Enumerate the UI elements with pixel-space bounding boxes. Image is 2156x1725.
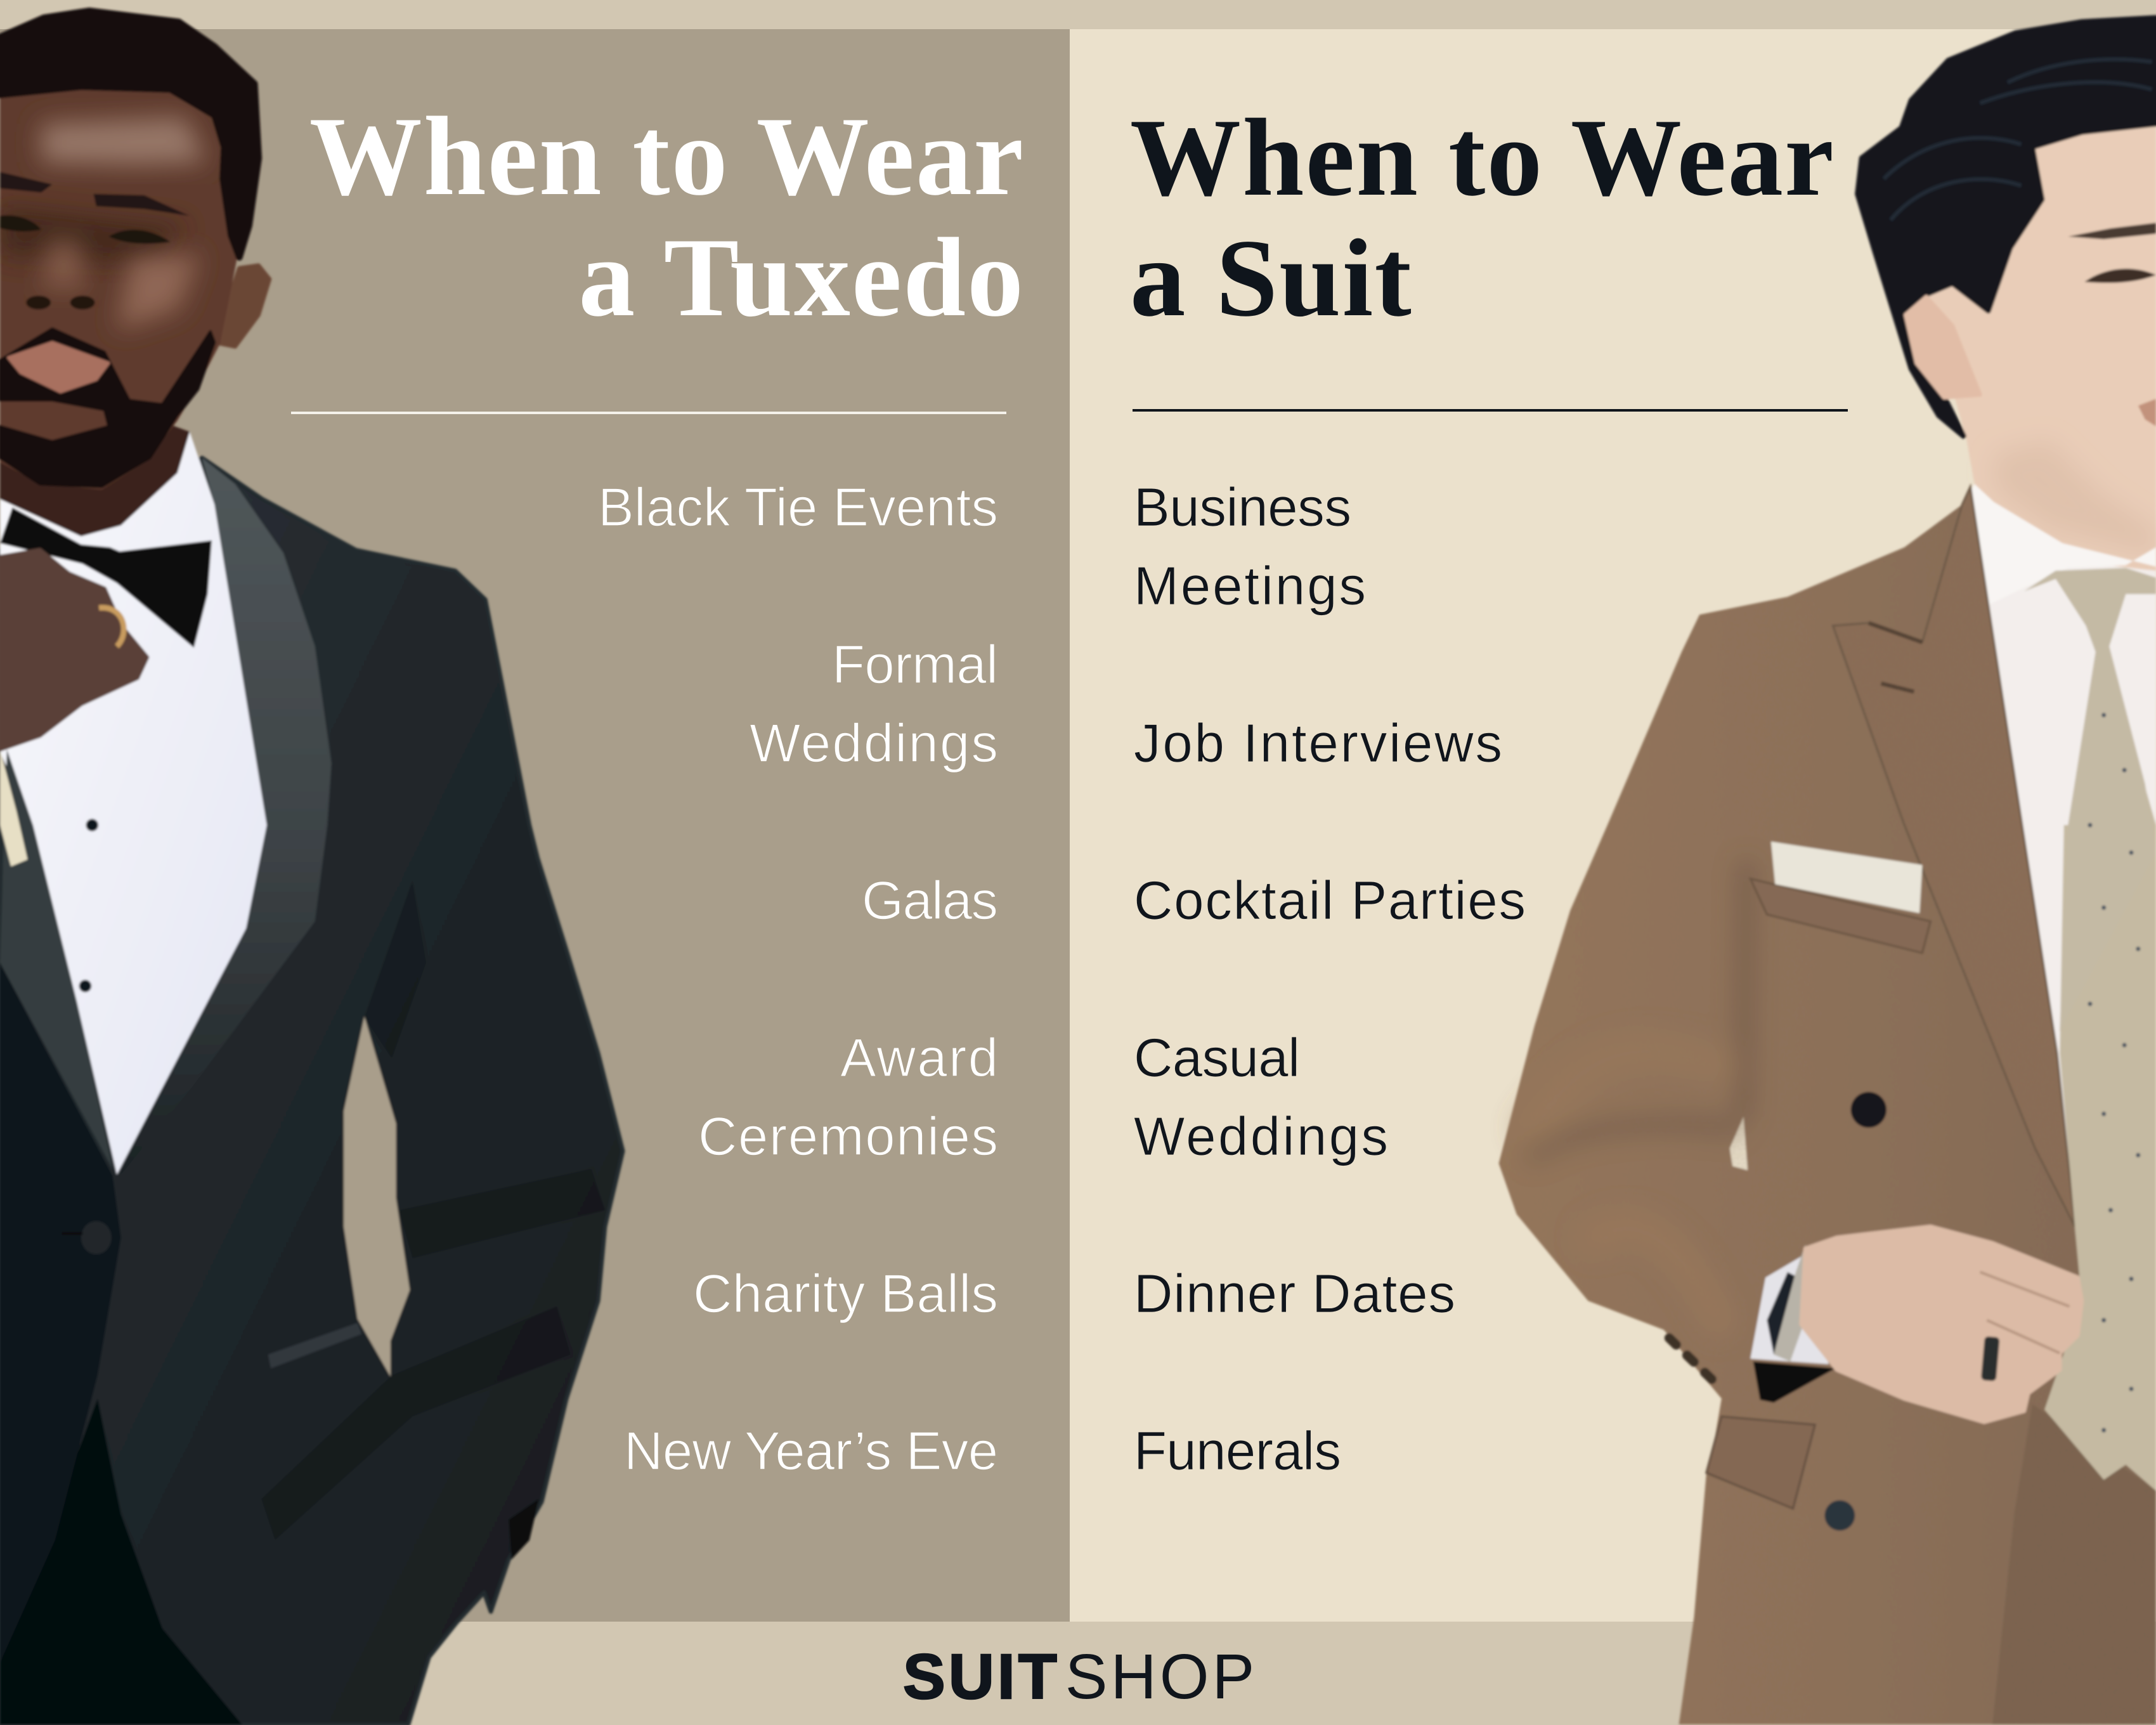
collar [1963, 484, 2156, 605]
buttons [1824, 1092, 1886, 1530]
breast pocket [1750, 879, 1930, 953]
waistcoat and tie [2044, 715, 2156, 1491]
list: suit occasions [1134, 478, 1526, 1481]
cheek highlight [117, 254, 199, 330]
list: suit occasions: Weddings [1134, 1107, 1388, 1167]
boutonniere and studs [0, 750, 98, 993]
cuff and watch [1750, 1240, 1836, 1403]
nose highlight [41, 240, 85, 289]
forehead highlight [41, 117, 206, 165]
title: tuxedo second line: a Tuxedo [578, 214, 1025, 340]
list: suit occasions: Dinner Dates [1134, 1264, 1455, 1324]
ear [1906, 297, 1980, 398]
sleeve buttons [509, 1499, 539, 1559]
tweed noise [1730, 1121, 1814, 1400]
list: tuxedo occasions: Formal [832, 635, 998, 695]
list: tuxedo occasions: Galas [862, 871, 998, 931]
tie dots [2088, 713, 2140, 1433]
list: tuxedo occasions: New Year’s Eve [624, 1421, 998, 1481]
tweed jacket [1499, 487, 2156, 1724]
list: suit occasions: Funerals [1134, 1421, 1341, 1481]
list: suit occasions: Business [1134, 478, 1351, 538]
list: suit occasions: Casual [1134, 1028, 1300, 1088]
lapel [1833, 487, 2075, 1227]
list: tuxedo occasions: Ceremonies [698, 1107, 998, 1167]
ear [214, 266, 270, 346]
sleeve buttons [1669, 1338, 1713, 1381]
title: tuxedo: When to Wear [309, 93, 1025, 219]
jacket left panel shadow [0, 963, 121, 1663]
divider: tuxedo [291, 412, 1006, 414]
list: suit occasions: Meetings [1134, 556, 1366, 616]
bow tie [0, 507, 212, 648]
list: tuxedo occasions: Weddings [750, 713, 998, 774]
jacket shading [1533, 866, 1746, 1320]
upper tie [2024, 568, 2156, 1031]
shirt [1963, 484, 2156, 1238]
neck shadow [1994, 440, 2156, 557]
shawl lapel right [117, 458, 332, 1180]
list: tuxedo occasions [598, 478, 998, 1481]
neck [0, 413, 190, 537]
panel: suit [1070, 29, 2156, 1622]
list: tuxedo occasions: Award [840, 1028, 998, 1088]
brows and eyes [0, 172, 190, 244]
hand [0, 550, 147, 750]
hand [1802, 1227, 2082, 1422]
hair [1858, 18, 2156, 436]
nose [26, 296, 95, 309]
panel: tuxedo [0, 29, 1070, 1622]
photo: man in tuxedo [0, 11, 623, 1724]
divider: suit [1133, 409, 1848, 412]
ring [99, 608, 124, 646]
arm and body gap [1730, 1117, 1748, 1170]
brow and eye [2068, 223, 2156, 426]
lapel notch [1869, 623, 1922, 692]
list: suit occasions: Job Interviews [1134, 713, 1502, 774]
face [0, 68, 240, 490]
title: suit: When to Wear [1130, 96, 1835, 219]
pocket square [1771, 842, 1922, 913]
logo: SUITSHOP [903, 1641, 1257, 1712]
gap between arm and body [344, 1016, 410, 1377]
flap pocket [1706, 1416, 1815, 1509]
jacket button and pocket [62, 1221, 361, 1369]
list: tuxedo occasions: Black Tie Events [598, 478, 998, 538]
hair [0, 11, 259, 257]
beard [0, 329, 214, 487]
lips [8, 342, 108, 392]
trousers [0, 1398, 242, 1724]
shawl lapel left [0, 750, 113, 1169]
neck and face [1926, 117, 2156, 571]
photo: man in suit [1499, 18, 2156, 1724]
shirt [0, 432, 267, 1175]
finger lines and ring [1980, 1272, 2069, 1381]
eye socket shade [0, 206, 186, 261]
jacket fold shadows [261, 880, 605, 1540]
title: suit second line: a Suit [1130, 216, 1413, 339]
hair highlights [1884, 60, 2152, 220]
trousers [1992, 1404, 2156, 1724]
list: suit occasions: Cocktail Parties [1134, 871, 1526, 931]
tuxedo jacket [0, 458, 623, 1724]
list: tuxedo occasions: Charity Balls [693, 1264, 998, 1324]
